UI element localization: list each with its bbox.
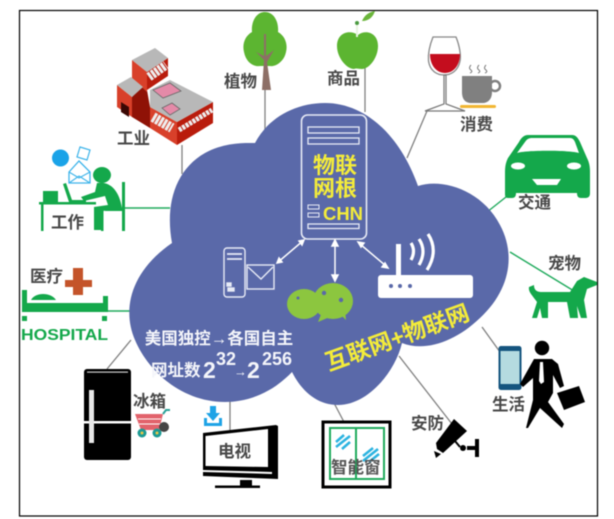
label: 宠物: 宠物 <box>548 253 581 273</box>
icon: dog <box>529 277 597 318</box>
text: address count <box>151 349 292 383</box>
label: 智能窗: 智能窗 <box>331 457 380 477</box>
icon: phone <box>498 346 522 390</box>
icon: worker at desk <box>39 147 125 231</box>
icon: small server and mail <box>224 248 274 297</box>
arrows from server <box>277 240 388 281</box>
icon: wine glass <box>425 37 465 111</box>
label: 商品: 商品 <box>327 69 360 88</box>
label: 医疗: 医疗 <box>30 266 63 286</box>
label: 交通: 交通 <box>518 192 552 212</box>
icon: red cross <box>65 268 92 295</box>
label: 冰箱: 冰箱 <box>133 392 166 411</box>
text: address count: 256 <box>262 349 292 369</box>
icon: server with 物联网根 CHN: 网根 <box>313 176 357 201</box>
icon: download <box>204 406 222 426</box>
icon: car <box>505 135 590 198</box>
text: 美国独控 各国自主: 美国独控→各国自主 <box>145 328 293 348</box>
label: 消费: 消费 <box>460 115 493 134</box>
label: 工业: 工业 <box>117 129 150 148</box>
text: address count: 2 <box>203 357 216 383</box>
icon: wechat <box>287 283 353 322</box>
text: 互联网+物联网: 互联网+物联网 <box>322 299 473 376</box>
icon: hospital bed <box>22 290 108 321</box>
icon: TV <box>203 425 278 488</box>
label: 安防: 安防 <box>411 413 444 433</box>
label: 生活: 生活 <box>492 395 525 414</box>
connector lines <box>107 68 574 430</box>
label: 植物: 植物 <box>224 71 257 91</box>
icon: factory <box>117 48 213 145</box>
icon: coffee cup <box>460 65 500 108</box>
label: HOSPITAL: HOSPITAL <box>21 327 108 344</box>
icon: router <box>378 234 473 298</box>
icon: shopping cart <box>135 410 170 438</box>
icon: fridge <box>84 369 131 460</box>
icon: server with 物联网根 CHN: 物联 <box>313 153 357 178</box>
text: address count: 网址数 <box>151 361 201 380</box>
icon: window <box>323 422 390 487</box>
text: address count: 32 <box>216 349 236 369</box>
icon: businessman <box>520 341 585 428</box>
icon: camera <box>434 419 479 458</box>
label: 工作: 工作 <box>51 213 84 232</box>
icon: tree <box>243 12 287 90</box>
icon: server with 物联网根 CHN <box>302 115 366 239</box>
icon: server with 物联网根 CHN: CHN <box>323 204 363 224</box>
label: 电视: 电视 <box>218 442 252 461</box>
icon: apple <box>337 11 378 69</box>
text: address count: 2 <box>247 357 260 383</box>
text: address count: → <box>234 364 247 379</box>
cloud <box>129 103 509 405</box>
